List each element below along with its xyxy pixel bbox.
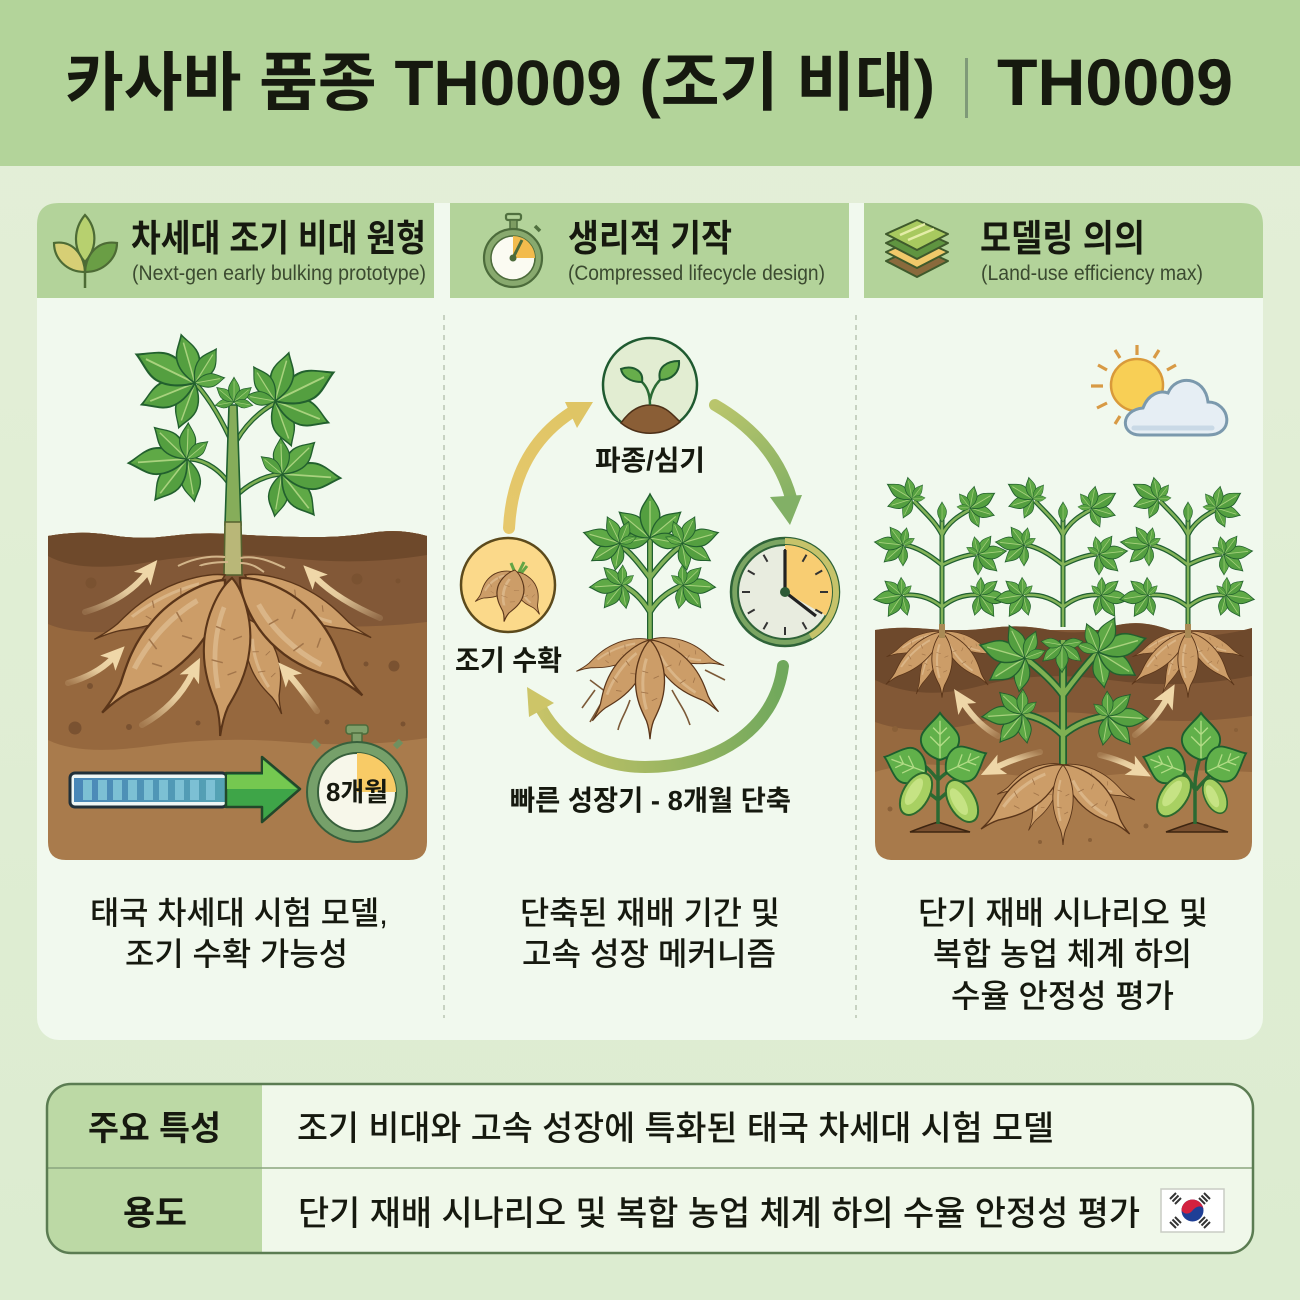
icon: land layers	[886, 220, 948, 277]
heading: prototype: 차세대 조기 비대 원형	[131, 218, 426, 259]
arrow: sowing to growth	[715, 405, 802, 525]
label: fast growth: 빠른 성장기 - 8개월 단축	[510, 785, 791, 816]
panel header: prototype	[37, 203, 434, 298]
row text: key traits: 조기 비대와 고속 성장에 특화된 태국 차세대 시험 모델	[297, 1110, 1054, 1148]
sun and cloud	[1091, 345, 1227, 435]
subheading: modelling: (Land-use efficiency max)	[981, 262, 1203, 285]
fine roots	[178, 557, 285, 572]
caption: modelling: 단기 재배 시나리오 및	[918, 895, 1208, 931]
caption: physiology: 단축된 재배 기간 및	[520, 895, 780, 931]
title: 카사바 품종 TH0009 (조기 비대)	[65, 47, 935, 119]
bean plant right	[1137, 713, 1254, 832]
nutrient arrows	[68, 574, 380, 725]
header band	[0, 0, 1300, 166]
heading: physiology: 생리적 기작	[568, 218, 732, 259]
cassava leaves	[108, 307, 362, 534]
row label: use: 용도	[123, 1195, 187, 1233]
clock circle	[731, 538, 839, 646]
cassava row above ground	[865, 465, 1262, 627]
caption: physiology	[520, 895, 780, 972]
caption: modelling	[918, 895, 1208, 1014]
heading: modelling: 모델링 의의	[980, 218, 1145, 259]
label: sowing: 파종/심기	[595, 445, 705, 476]
stem	[190, 385, 280, 575]
caption: modelling: 복합 농업 체계 하의	[933, 936, 1192, 972]
soil cross-section	[48, 531, 427, 860]
bean plant left	[878, 713, 994, 832]
subheading: prototype: (Next-gen early bulking prototype)	[132, 262, 426, 285]
caption: prototype	[90, 895, 388, 972]
cassava roots left	[880, 624, 1000, 698]
subheading: physiology: (Compressed lifecycle design)	[568, 262, 825, 285]
title code: TH0009	[997, 45, 1233, 119]
panel header: physiology	[450, 203, 849, 298]
label: harvest: 조기 수확	[455, 645, 562, 676]
stopwatch: 8 months	[307, 725, 407, 842]
soil cross-section	[875, 623, 1252, 860]
panel header: modelling	[864, 203, 1263, 298]
central cassava plant	[962, 596, 1165, 845]
central plant	[569, 494, 733, 739]
row text: use: 단기 재배 시나리오 및 복합 농업 체계 하의 수율 안정성 평가	[298, 1195, 1140, 1233]
summary table	[47, 1084, 1253, 1253]
caption: modelling: 수율 안정성 평가	[951, 978, 1174, 1014]
caption: physiology: 고속 성장 메커니즘	[522, 936, 776, 972]
cassava roots right	[1126, 624, 1246, 698]
interaction arrows	[964, 700, 1166, 768]
illustration: lifecycle diagram	[455, 338, 839, 816]
tubers	[84, 560, 380, 738]
sowing circle	[603, 338, 697, 433]
arrow: harvest to sowing	[509, 402, 593, 528]
row label: key traits: 주요 특성	[88, 1110, 221, 1148]
progress bar arrow	[70, 757, 300, 822]
icon: sprout leaves	[54, 215, 117, 288]
harvest circle	[461, 538, 555, 632]
arrow: growth to harvest	[527, 666, 783, 767]
main card	[37, 203, 1263, 1040]
title separator	[965, 58, 968, 118]
illustration: intercropping land use	[865, 345, 1262, 860]
caption: prototype: 태국 차세대 시험 모델,	[90, 895, 388, 931]
stopwatch label: 8개월	[326, 777, 388, 807]
caption: prototype: 조기 수확 가능성	[125, 936, 348, 972]
icon: Korean flag	[1161, 1189, 1224, 1232]
illustration: cassava with bulked roots	[48, 307, 427, 860]
icon: stopwatch	[484, 214, 542, 287]
